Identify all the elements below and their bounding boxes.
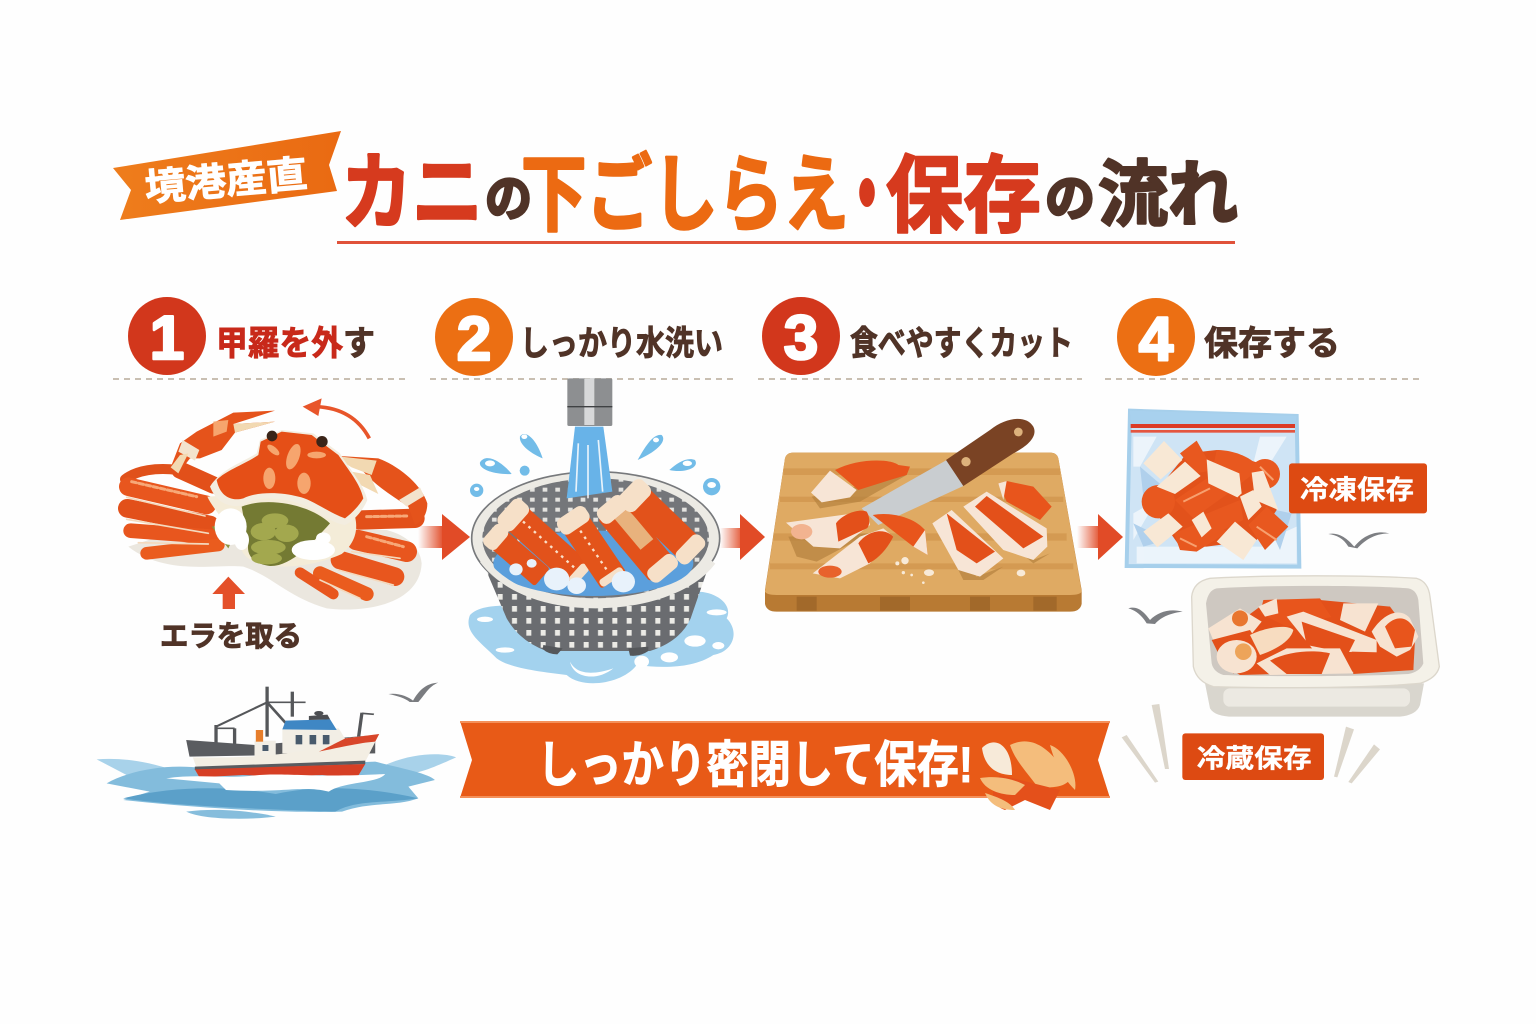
banner: 境港産直: 境港産直 <box>143 154 309 210</box>
step 2 heading: 2 <box>457 305 491 374</box>
icon: crab pieces <box>980 741 1075 810</box>
label: remove gills: エラを取る <box>160 621 302 653</box>
crab pieces in tray <box>1208 598 1418 675</box>
illustration: fishing boat on waves <box>97 683 456 819</box>
bird <box>1328 532 1389 548</box>
rim and inner bowl <box>472 472 720 605</box>
seagull <box>388 683 438 702</box>
illustration: washing crab legs in colander <box>468 378 734 683</box>
knife <box>862 419 1035 525</box>
step 1 heading: す <box>343 325 375 363</box>
step 2 heading: しっかり水洗い <box>520 325 723 363</box>
step 1 heading: 甲羅を外 <box>216 325 343 363</box>
freezer bag <box>1127 411 1299 567</box>
step 1 heading: 1 <box>150 304 184 373</box>
droplets <box>470 434 720 497</box>
title: 流れ <box>1098 156 1238 236</box>
illustration: crab on cutting board with knife <box>765 419 1082 612</box>
waves <box>97 754 456 819</box>
colander front rim <box>483 560 713 605</box>
step 3 heading: 3 <box>784 304 818 373</box>
arrow: step 2 to 3 <box>720 514 765 560</box>
title: の <box>485 171 532 227</box>
crab pieces on board <box>786 460 1052 584</box>
crab legs in colander <box>481 476 708 590</box>
board <box>765 453 1082 612</box>
title: 下ごしらえ <box>521 148 849 242</box>
step 1 heading <box>128 297 375 375</box>
burst lines <box>1122 704 1380 783</box>
step 2 heading <box>435 298 723 376</box>
boat <box>186 687 379 778</box>
water bubbles <box>509 559 635 594</box>
step 4 heading: 4 <box>1139 305 1174 374</box>
arrow: up to gills <box>212 577 245 609</box>
water puddle <box>468 592 734 683</box>
faucet <box>567 378 612 426</box>
ribbon: seal tightly message: しっかり密閉して保存! <box>537 737 973 793</box>
step 4 heading <box>1117 298 1340 376</box>
title <box>337 146 1238 244</box>
refrigerator tray <box>1192 576 1439 717</box>
illustration: storage <box>1122 411 1439 783</box>
bird <box>1128 608 1183 624</box>
water stream <box>567 427 612 498</box>
arrow: lift shell <box>303 398 369 438</box>
arrow: step 1 to 2 <box>418 514 470 560</box>
freezer label: 冷凍保存 <box>1300 475 1414 505</box>
foam <box>166 774 385 792</box>
banner: 境港産直 <box>113 131 341 220</box>
title: 保存 <box>886 149 1041 243</box>
illustration: crab with shell being removed <box>125 398 427 610</box>
arrow: step 3 to 4 <box>1077 514 1123 560</box>
refrigerator label: 冷蔵保存 <box>1197 743 1312 773</box>
freezer label <box>1289 463 1427 513</box>
colander wall <box>487 570 707 656</box>
step 4 heading: 保存する <box>1204 325 1340 363</box>
step 3 heading <box>762 297 1073 375</box>
ribbon: seal tightly message <box>460 721 1110 810</box>
title: の <box>1045 171 1095 227</box>
step 3 heading: 食べやすくカット <box>850 325 1073 363</box>
refrigerator label <box>1182 733 1324 780</box>
title: カニ <box>341 146 483 240</box>
title: ・ <box>846 151 888 239</box>
